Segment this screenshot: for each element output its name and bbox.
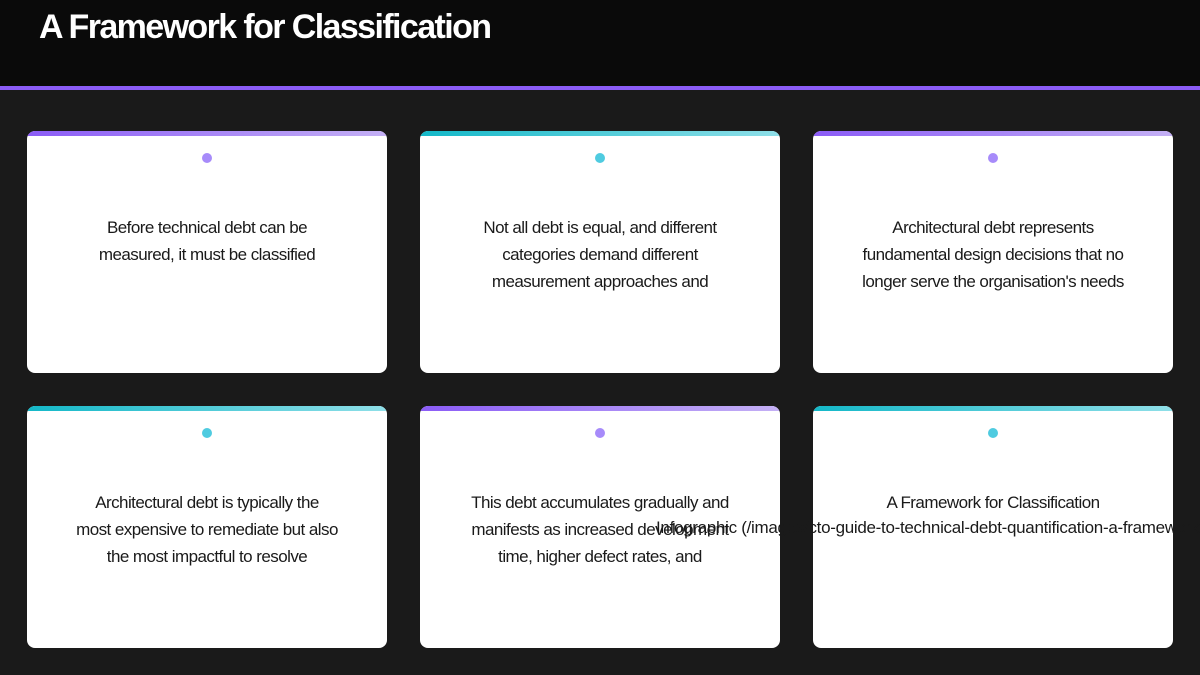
- card text: [76, 493, 338, 566]
- card text: [471, 493, 729, 566]
- header: [0, 0, 1200, 90]
- dot icon: [595, 153, 605, 163]
- card 5: [420, 406, 780, 648]
- card text: [99, 218, 315, 264]
- card text: the most impactful to resolve: [107, 547, 307, 566]
- card text: manifests as increased development: [471, 520, 729, 539]
- overflow caption text: Infographic (/images/cto-guide-to-technical-debt-quantification-a-framework: [656, 518, 1200, 537]
- card text: Architectural debt represents: [892, 218, 1094, 237]
- title: A Framework for Classification: [39, 8, 490, 46]
- card 1: [27, 131, 387, 373]
- card text: [483, 218, 717, 291]
- dot icon: [988, 428, 998, 438]
- card text: fundamental design decisions that no: [863, 245, 1123, 264]
- card text: longer serve the organisation's needs: [862, 272, 1124, 291]
- dot icon: [595, 428, 605, 438]
- dot icon: [988, 153, 998, 163]
- card text: [862, 218, 1124, 291]
- card 6: [813, 406, 1173, 648]
- card text: A Framework for Classification: [886, 493, 1100, 512]
- card text: most expensive to remediate but also: [76, 520, 338, 539]
- card 2: [420, 131, 780, 373]
- dot icon: [202, 428, 212, 438]
- card text: Before technical debt can be: [107, 218, 307, 237]
- dot icon: [202, 153, 212, 163]
- card text: time, higher defect rates, and: [498, 547, 702, 566]
- card 4: [27, 406, 387, 648]
- card text: measurement approaches and: [492, 272, 708, 291]
- card text: categories demand different: [502, 245, 698, 264]
- card text: This debt accumulates gradually and: [471, 493, 729, 512]
- card 3: [813, 131, 1173, 373]
- card text: Architectural debt is typically the: [95, 493, 319, 512]
- card text: Not all debt is equal, and different: [483, 218, 717, 237]
- card text: measured, it must be classified: [99, 245, 315, 264]
